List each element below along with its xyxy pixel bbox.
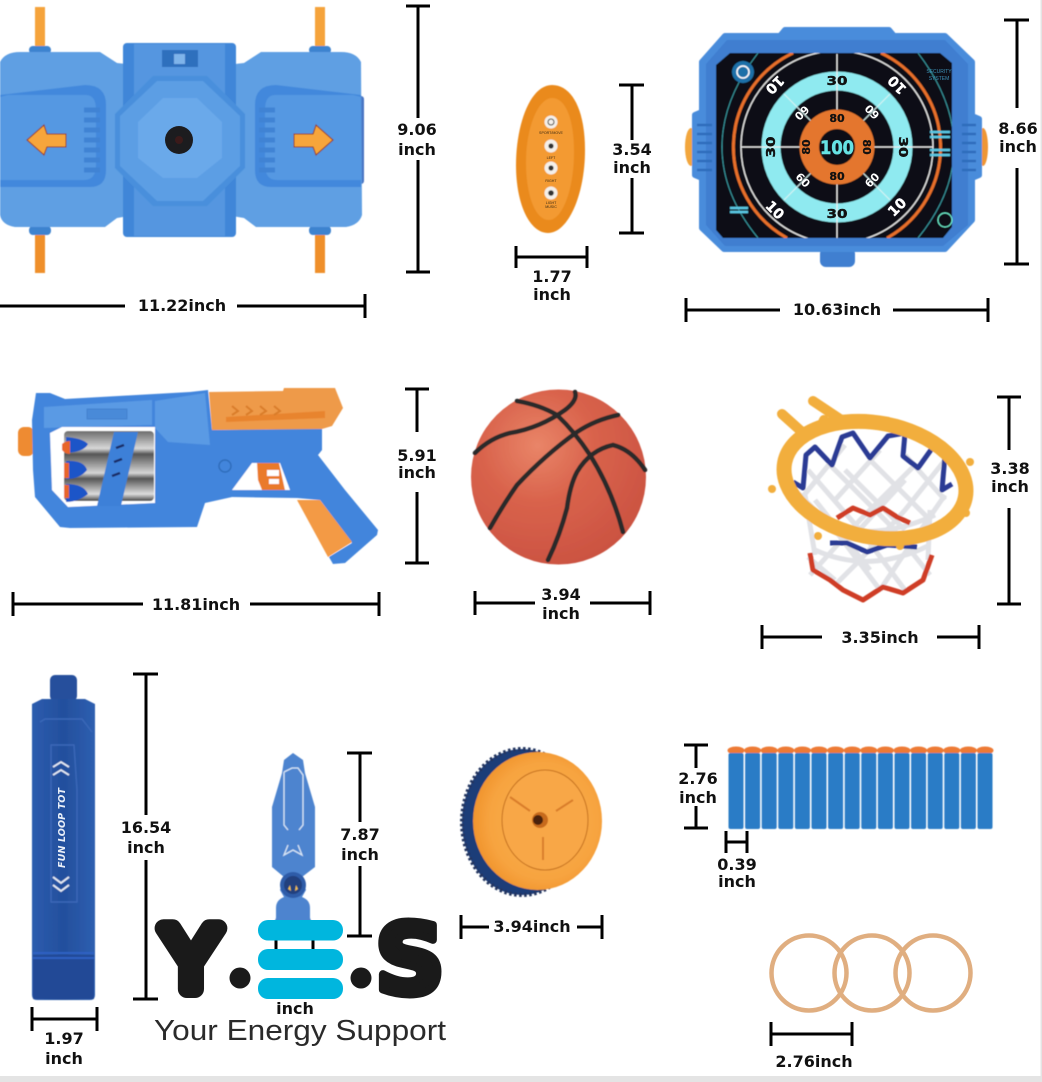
dimension: dart diameter xyxy=(717,831,757,891)
target score numbers: 10 xyxy=(885,195,910,220)
dimension: gun height: inch xyxy=(398,463,436,482)
logo: Y.E.S Your Energy Support xyxy=(154,904,446,1047)
dimension: remote height: inch xyxy=(613,158,651,177)
dimension: dart length: inch xyxy=(679,788,717,807)
dimension: sword height xyxy=(340,753,380,936)
dimension: target height: inch xyxy=(999,137,1037,156)
target corner caption: SECURITY xyxy=(926,69,952,75)
dimension: remote height: 3.54 xyxy=(612,140,652,159)
target corner caption: SYSTEM xyxy=(929,76,949,82)
illustration: basketball xyxy=(471,390,646,564)
dimension: hoop height xyxy=(990,397,1030,604)
dimension: wheel width: 3.94inch xyxy=(493,917,571,936)
illustration: toy gun xyxy=(18,388,378,564)
dimension: dart diameter: 0.39 xyxy=(717,855,757,874)
dimension: wheel width xyxy=(461,915,602,939)
illustration: rings xyxy=(772,936,970,1010)
target score numbers: 30 xyxy=(763,136,778,158)
remote button labels: RIGHT xyxy=(545,179,557,183)
illustration: launcher base xyxy=(0,7,364,273)
dimension: basketball width: 3.94 xyxy=(541,585,581,604)
dimension: basketball width xyxy=(475,585,650,623)
dimension: sword width (mostly hidden by logo) xyxy=(276,936,314,1018)
dimension: gun height xyxy=(397,389,437,563)
remote button labels: LEFT xyxy=(547,156,556,160)
illustration: foam darts xyxy=(728,746,994,829)
target score numbers: 30 xyxy=(826,73,848,88)
dimension: cylinder height: 16.54 xyxy=(121,818,171,837)
dimension: sword width (mostly hidden by logo): inch xyxy=(276,999,314,1018)
illustration: basketball hoop xyxy=(768,401,976,600)
illustration: sword blade xyxy=(272,753,315,925)
dimension: hoop width xyxy=(762,625,979,649)
target score numbers: 80 xyxy=(829,170,845,183)
remote button labels: MUSIC xyxy=(545,205,557,209)
dimension: target height xyxy=(998,20,1038,264)
target corner caption xyxy=(926,69,952,82)
dimension: cylinder height xyxy=(121,674,171,999)
logo: Y.E.S Your Energy Support: Your Energy Support xyxy=(154,1015,446,1047)
dimension: basketball width: inch xyxy=(542,604,580,623)
target score numbers xyxy=(762,72,911,223)
dimension: dart diameter: inch xyxy=(718,872,756,891)
dimension: cylinder width: 1.97 xyxy=(44,1029,84,1048)
dimension: cylinder width xyxy=(32,1007,97,1068)
dimension: remote width: 1.77 xyxy=(532,267,572,286)
dimension: hoop height: inch xyxy=(991,477,1029,496)
dimension: target width xyxy=(686,298,988,322)
dimension: launcher width xyxy=(0,294,365,318)
dimension: dart length: 2.76 xyxy=(678,769,718,788)
target score numbers: 10 xyxy=(762,72,787,97)
target score numbers: 30 xyxy=(826,206,848,221)
target score numbers: 80 xyxy=(860,139,873,155)
target score numbers: 60 xyxy=(791,103,812,123)
dimension: hoop width: 3.35inch xyxy=(841,628,919,647)
target score numbers: 60 xyxy=(862,170,883,190)
illustration: remote control xyxy=(516,85,585,233)
dimension: target width: 10.63inch xyxy=(793,300,881,319)
target score numbers: 80 xyxy=(800,139,813,155)
dimension: gun height: 5.91 xyxy=(397,446,437,465)
dimension: remote width xyxy=(516,246,587,304)
dimension: gun width: 11.81inch xyxy=(152,595,240,614)
logo: Y.E.S Your Energy Support: S xyxy=(375,904,445,1016)
dimension: gun width xyxy=(13,592,379,616)
dimension: launcher height: inch xyxy=(398,140,436,159)
logo: Y.E.S Your Energy Support: Y xyxy=(162,909,220,1008)
target score numbers: 60 xyxy=(862,101,882,122)
target score numbers: 80 xyxy=(829,112,845,125)
dimension: dart length xyxy=(678,745,718,828)
remote button labels xyxy=(539,131,564,209)
target score numbers: 100 xyxy=(820,137,854,159)
dimension: sword height: inch xyxy=(341,845,379,864)
launcher centre hole xyxy=(165,126,193,154)
dimension: remote width: inch xyxy=(533,285,571,304)
dimension: ring width: 2.76inch xyxy=(775,1052,853,1071)
target score numbers: 10 xyxy=(885,72,910,97)
logo: three cyan bars xyxy=(258,920,343,999)
dimension: sword height: 7.87 xyxy=(340,825,380,844)
illustration: cylinder handle xyxy=(32,675,95,1000)
target score numbers: 60 xyxy=(793,170,813,191)
illustration: wheel xyxy=(462,749,602,895)
dimension: cylinder height: inch xyxy=(127,838,165,857)
dimension: launcher height: 9.06 xyxy=(397,120,437,139)
dimension: launcher width: 11.22inch xyxy=(138,296,226,315)
dimension: target height: 8.66 xyxy=(998,119,1038,138)
target score numbers: 30 xyxy=(896,136,911,158)
dimension: ring width xyxy=(771,1022,853,1071)
illustration: target board xyxy=(685,30,988,267)
cylinder handle lettering: FUN LOOP TOT xyxy=(57,786,68,868)
dimension: remote height xyxy=(612,85,652,233)
dimension: hoop height: 3.38 xyxy=(990,459,1030,478)
target score numbers: 10 xyxy=(762,198,787,223)
remote button labels: LIGHT xyxy=(546,201,557,205)
dimension: launcher height xyxy=(397,6,437,272)
launcher arrows xyxy=(27,125,333,155)
dimension: cylinder width: inch xyxy=(45,1049,83,1068)
remote button labels: SPORT/MOVE xyxy=(539,131,564,135)
